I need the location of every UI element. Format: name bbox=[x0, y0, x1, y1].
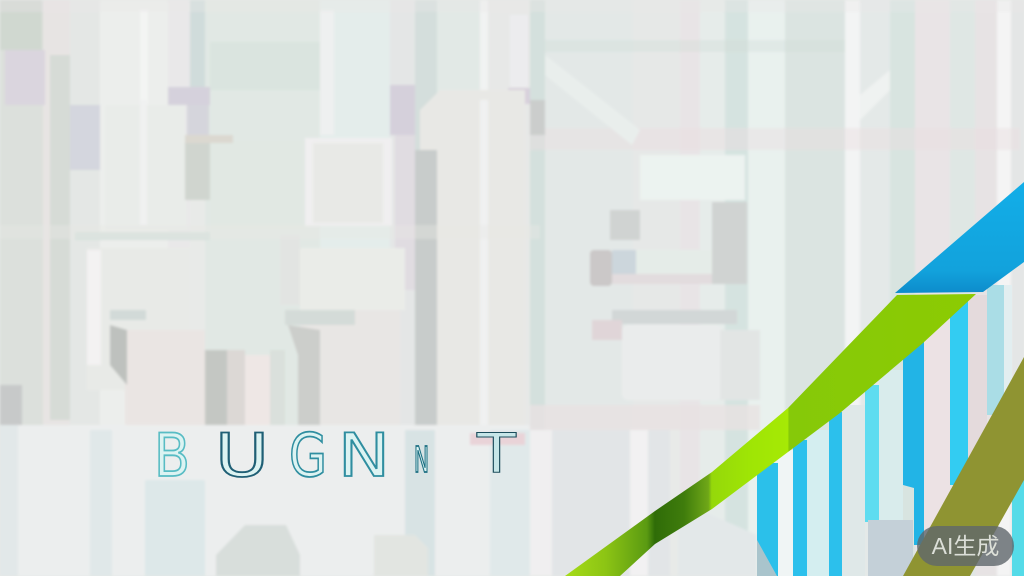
arrow: green band bbox=[565, 294, 976, 576]
title: U bbox=[215, 421, 269, 491]
title: B bbox=[154, 421, 190, 491]
badge: AI generated bbox=[917, 526, 1014, 566]
arrow: blue head bbox=[895, 182, 1024, 293]
title: G bbox=[289, 421, 327, 491]
chart: cyan bars bbox=[757, 285, 1024, 576]
title: N bbox=[338, 421, 390, 491]
arrow: olive band bbox=[903, 357, 1024, 576]
title: T bbox=[476, 422, 517, 485]
title bbox=[154, 421, 517, 491]
badge: AI generated: AI生成 bbox=[932, 533, 999, 559]
title: N bbox=[414, 440, 429, 481]
